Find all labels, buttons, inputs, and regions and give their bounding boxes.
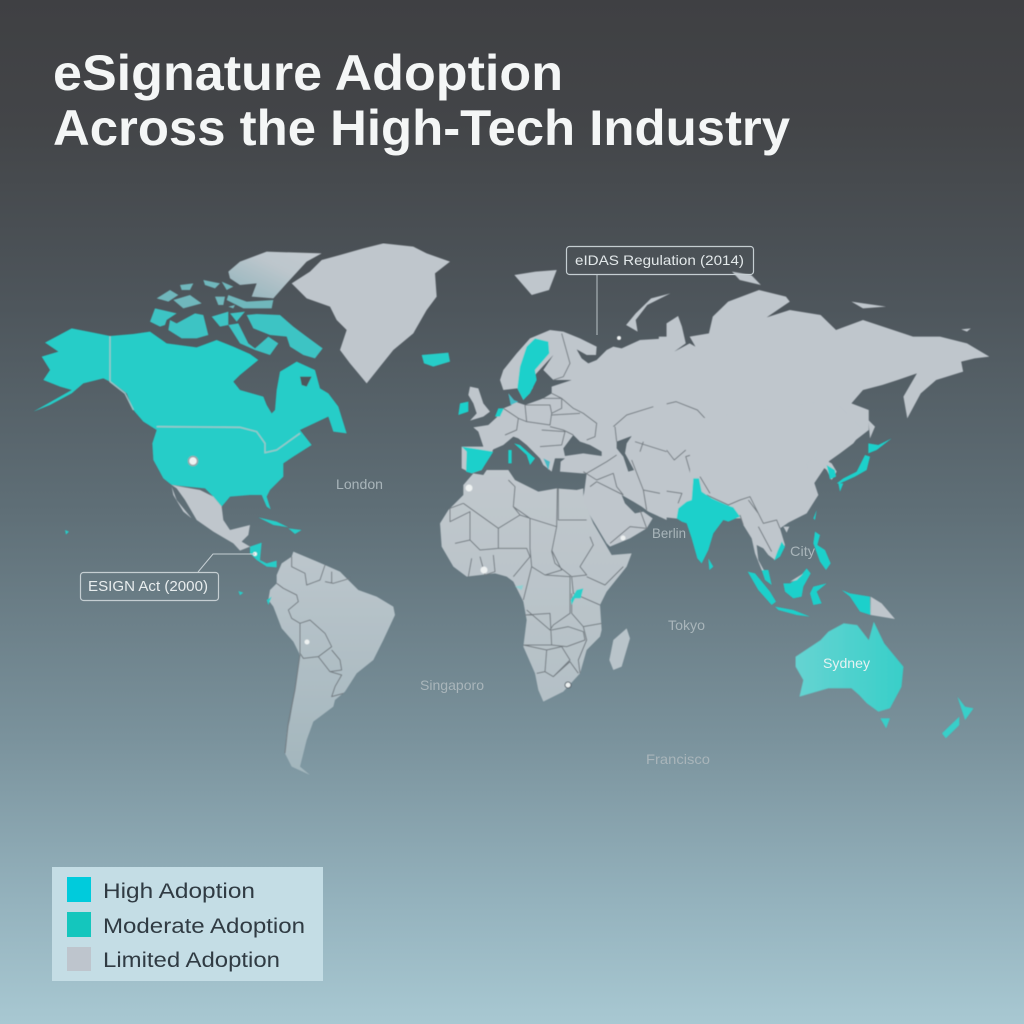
- Central and East Asia borders: [651, 402, 849, 503]
- Tasmania and New Zealand: [880, 697, 974, 738]
- faint city labels: Sydney: [823, 655, 870, 671]
- callout: ESIGN Act: ESIGN Act (2000): [88, 579, 208, 595]
- Mexico: [172, 485, 250, 551]
- faint city labels: Francisco: [646, 751, 710, 767]
- SE Asia and Japan highlights: [708, 438, 892, 617]
- title: Across the High-Tech Industry: [53, 100, 790, 156]
- SE Asia borders: [700, 477, 780, 552]
- legend item: limited adoption: [67, 947, 280, 972]
- Madagascar: [609, 628, 630, 670]
- faint city labels: Tokyo: [668, 617, 705, 633]
- USA and Canada: [33, 328, 347, 509]
- Greenland: [292, 243, 450, 383]
- world map: [33, 243, 989, 775]
- Sakhalin and Hainan: [783, 420, 875, 533]
- Arctic islands: [150, 252, 323, 358]
- Hudson Strait water: [300, 377, 312, 387]
- faint city labels: London: [336, 476, 383, 492]
- Australia: [796, 622, 903, 712]
- map: Europe and West Asia: [458, 330, 667, 547]
- north Borneo and Papua New Guinea: [790, 573, 895, 619]
- Uganda and Gabon highlights: [571, 588, 583, 605]
- Europe borders: [503, 333, 667, 543]
- Africa: [440, 470, 632, 702]
- location dots: [188, 336, 626, 688]
- Central America and Caribbean: [65, 353, 450, 595]
- map: North America and Greenland: [33, 243, 450, 595]
- India: [677, 478, 740, 563]
- map: Australia and New Zealand: [796, 622, 974, 738]
- South America: [267, 552, 395, 775]
- Ecuador highlight: [267, 597, 272, 605]
- faint city labels: [336, 476, 870, 767]
- faint city labels: City: [790, 543, 815, 559]
- callout: eIDAS Regulation: [566, 246, 754, 335]
- callout: ESIGN Act: [80, 554, 255, 600]
- Europe, Turkey and Arabia: [462, 330, 667, 547]
- legend item: moderate adoption: [67, 912, 305, 938]
- Denmark and Greece: [508, 393, 550, 470]
- map: Russia and north Asia: [514, 270, 989, 520]
- legend item: limited adoption: Limited Adoption: [103, 949, 280, 972]
- faint city labels: Singaporo: [420, 677, 484, 693]
- legend: [52, 867, 323, 981]
- Africa borders: [450, 480, 623, 677]
- China coast and Indochina: [690, 400, 863, 578]
- title: [53, 45, 790, 156]
- Arctic Eurasia islands: [514, 270, 971, 332]
- Europe adoption highlights: [458, 338, 549, 473]
- legend item: high adoption: High Adoption: [103, 880, 255, 903]
- US and Canada borders: [110, 336, 300, 453]
- South America borders: [277, 557, 350, 753]
- legend item: moderate adoption: Moderate Adoption: [103, 915, 305, 938]
- faint city labels: Berlin: [652, 525, 686, 541]
- legend item: high adoption: [67, 877, 255, 903]
- UK: [468, 387, 490, 421]
- callout: eIDAS Regulation: eIDAS Regulation (2014): [575, 252, 744, 268]
- South and Southeast Asia: [677, 400, 895, 619]
- title: eSignature Adoption: [53, 45, 563, 101]
